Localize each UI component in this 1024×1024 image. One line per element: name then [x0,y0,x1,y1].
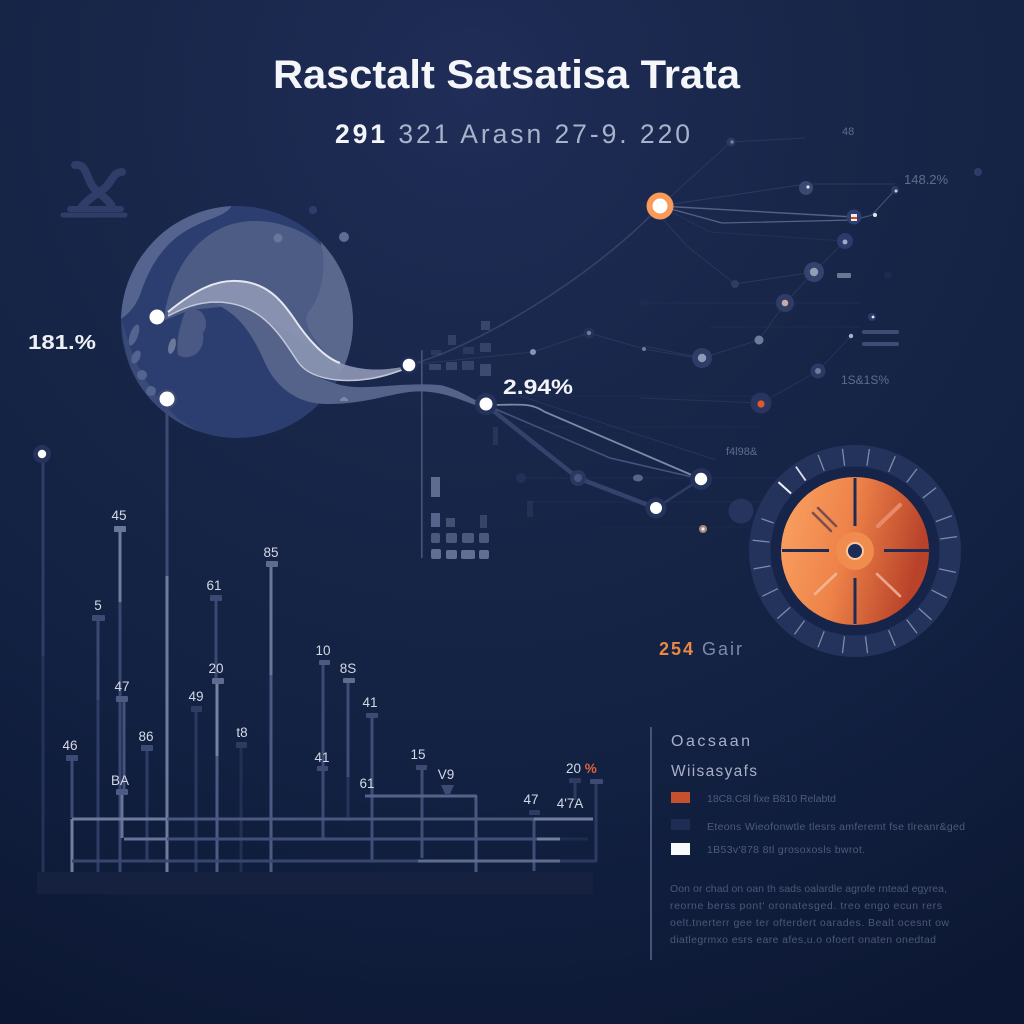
panel: center mini bars [421,321,533,559]
network labels: 48 [842,126,854,138]
bar value labels: 49 [188,689,204,704]
bar value labels: 47 [523,792,539,807]
gauge diagonal marks [813,505,900,596]
network labels: f4l98& [726,446,758,458]
base band [37,872,593,894]
legend item: red: 18C8.C8l fixe B810 Relabtd [707,793,836,805]
network labels: 148.2% [904,172,949,187]
bar value labels: 61 [359,776,375,791]
network labels [726,126,949,458]
bar caps [66,526,603,815]
ribbon top edge [168,281,340,363]
legend item: white: 1B53v'878 8tl grosoxosls bwrot. [707,844,865,856]
legend paragraph [670,883,949,946]
bar value labels [62,508,583,811]
tail band [213,303,486,408]
icon: crossed emblem [63,165,125,215]
subtitle: 291 321 Arasn 27-9. 220 [335,119,690,149]
bar value labels: 46 [62,738,78,753]
bar value labels: 20 [208,661,224,676]
gauge dial [749,445,961,657]
white junction nodes [33,310,712,518]
bar value labels: 85 [263,545,279,560]
legend item: navy: Eteons Wieofonwtle tlesrs amferemt fse tlreanr&ged [707,821,965,833]
legend paragraph: reorne berss pont' oronatesged. treo engo ecun rers [670,900,942,912]
bar value labels: 86 [138,729,154,744]
title: Rasctalt Satsatisa Trata [273,53,741,97]
legend paragraph: diatlegrmxo esrs eare afes,u.o ofoert onaten onedtad [670,934,936,946]
bar value labels: 41 [362,695,378,710]
bar value labels: 41 [314,750,330,765]
grid rails [72,796,597,872]
panel: legend [650,727,965,960]
bar value labels: 45 [111,508,127,523]
gauge tick marks [753,449,957,653]
bar value labels: BA [111,773,129,788]
chart: blob with flowing ribbon [121,206,476,438]
callout: 181 percent: 181.% [28,332,96,354]
gauge caption: 254 Gair [659,639,742,659]
gauge inner ring [770,466,940,636]
bar value labels: 4'7A [557,796,583,811]
panel: network lines [408,138,895,527]
legend heading: Oacsaan [671,733,750,750]
bar value labels: 5 [94,598,102,613]
value label: 20 percent: 20 % [566,761,597,776]
bar value labels: V9 [438,767,454,782]
gauge outer ring [749,445,961,657]
gauge hub [836,532,874,570]
callout: 2.94 percent: 2.94% [503,375,573,399]
legend subheading: Wiisasyafs [671,763,757,780]
legend paragraph: Oon or chad on oan th sads oalardle agrofe rntead egyrea, [670,883,947,895]
bar value labels: t8 [236,725,248,740]
bar value labels: 8S [340,661,356,676]
bar value labels: 47 [114,679,130,694]
ribbon [168,281,402,381]
gauge orange disc [781,477,929,625]
panel: nodes [33,126,982,533]
gauge crosshair [782,478,930,624]
sphere light regions [121,206,353,431]
bar value labels: 10 [315,643,331,658]
small network nodes [516,138,982,533]
network labels: 1S&1S% [841,373,889,387]
legend paragraph: oelt.tnerterr gee ter ofterdert oarades. Bealt ocesnt ow [670,917,949,929]
chart: lollipop bars [37,410,603,894]
ribbon lower edge [168,302,402,381]
small floating dots [274,234,282,242]
bar value labels: 15 [410,747,426,762]
bar value labels: 61 [206,578,222,593]
sphere base [121,206,353,438]
orange hub node [646,192,674,220]
